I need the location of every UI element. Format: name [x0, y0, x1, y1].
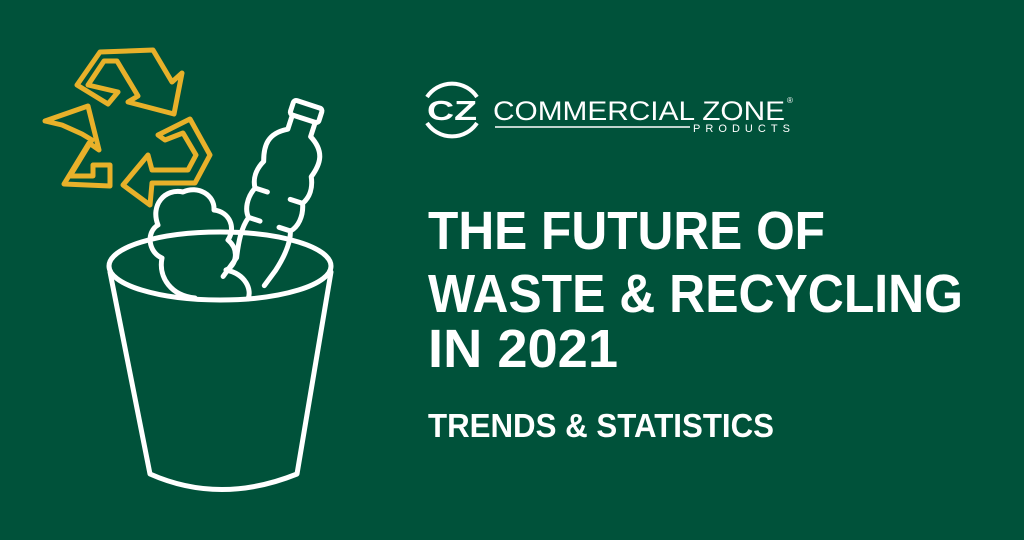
logo: CZ	[427, 95, 477, 126]
icon: bottle	[222, 96, 336, 294]
title: WASTE & RECYCLING	[428, 264, 963, 324]
logo: PRODUCTS	[693, 123, 790, 135]
icon: broccoli	[150, 190, 249, 299]
icon: bucket rim	[109, 232, 331, 300]
subtitle: TRENDS & STATISTICS	[428, 407, 774, 444]
logo: COMMERCIAL ZONE	[493, 96, 785, 126]
icon: bucket body	[110, 272, 331, 490]
title: IN 2021	[428, 319, 618, 379]
icon: waste bucket with broccoli and bottle	[109, 96, 336, 489]
logo: ®	[787, 96, 793, 105]
title: THE FUTURE OF	[428, 201, 825, 261]
icon: recycle symbol	[45, 50, 210, 205]
logo	[427, 84, 793, 136]
title	[428, 201, 963, 379]
